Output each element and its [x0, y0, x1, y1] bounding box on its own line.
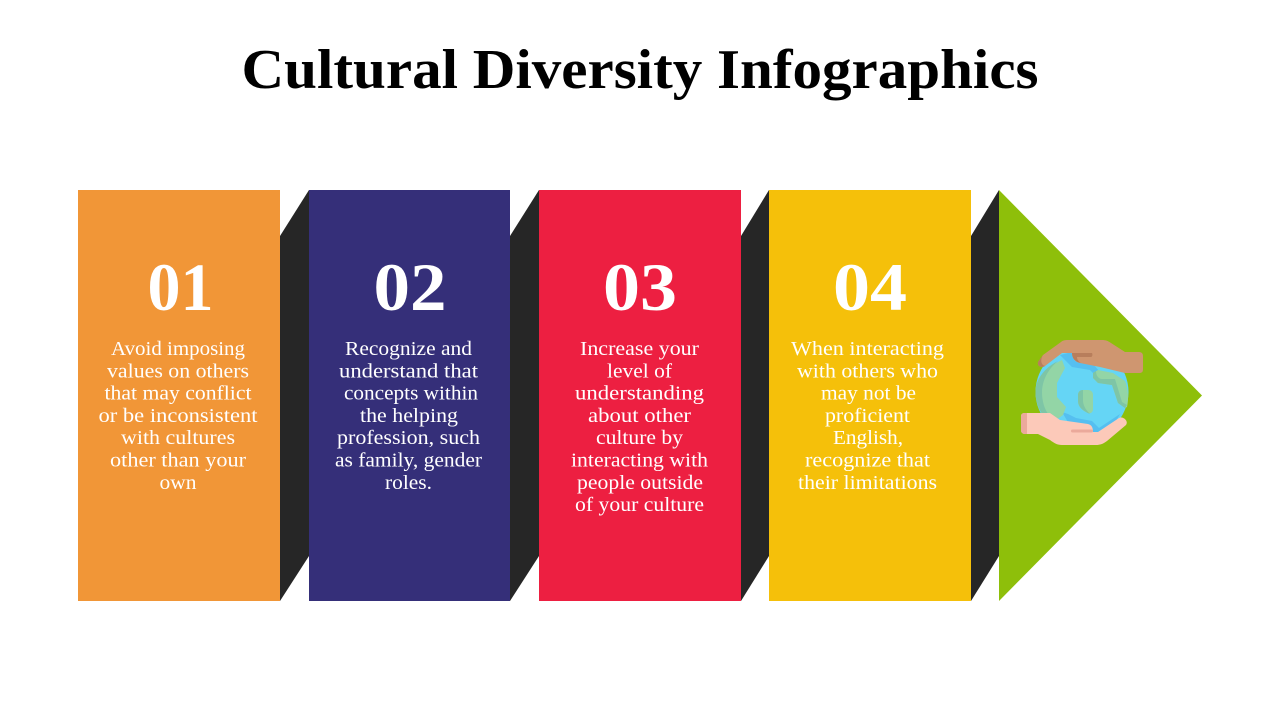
text block 04: proficient	[825, 405, 910, 427]
text block 01: other than your	[110, 450, 246, 472]
text block 03: culture by	[596, 427, 684, 449]
text block 03: about other	[588, 405, 691, 427]
center land	[1078, 390, 1093, 413]
text block 03: people outside	[577, 472, 703, 494]
text block 02: understand that	[339, 360, 478, 382]
fold connector 3	[741, 190, 769, 601]
text block 04	[791, 338, 944, 494]
text block 03	[571, 338, 708, 516]
text block 04: recognize that	[805, 450, 930, 472]
text block 02: as family, gender	[335, 450, 482, 472]
fold connector 1	[280, 190, 309, 601]
text block 03: Increase your	[580, 338, 699, 360]
panel: step 02	[309, 190, 510, 601]
text block 04: When interacting	[791, 338, 944, 360]
text block 01: values on others	[107, 360, 249, 382]
number 01: 01	[148, 249, 214, 325]
panel: step 04	[769, 190, 971, 601]
text block 01: with cultures	[121, 427, 235, 449]
fold connector 4	[971, 190, 999, 601]
text block 01: or be inconsistent	[98, 405, 258, 427]
text block 02: Recognize and	[345, 338, 472, 360]
right land	[1093, 370, 1128, 408]
fold connector 2	[510, 190, 539, 601]
panel: step 01	[78, 190, 280, 601]
panel: step 03	[539, 190, 741, 601]
text block 01: Avoid imposing	[111, 338, 245, 360]
left land	[1036, 360, 1066, 423]
text block 02: roles.	[385, 472, 432, 494]
text block 03: understanding	[575, 383, 704, 405]
text block 01	[98, 338, 258, 494]
text block 04: English,	[833, 427, 903, 449]
text block 02: concepts within	[344, 383, 478, 405]
text block 02	[335, 338, 482, 494]
text block 03: interacting with	[571, 450, 708, 472]
dark blue coast shading	[1060, 352, 1120, 436]
title: Cultural Diversity Infographics	[242, 39, 1038, 101]
text block 03: of your culture	[575, 494, 704, 516]
icon: hands holding globe	[1021, 340, 1143, 445]
text block 03: level of	[607, 360, 672, 382]
text block 01: own	[160, 472, 196, 494]
text block 04: their limitations	[798, 472, 937, 494]
text block 02: profession, such	[337, 427, 480, 449]
number 03: 03	[603, 249, 677, 325]
arrow head	[999, 190, 1202, 601]
lower hand	[1021, 413, 1127, 445]
text block 04: with others who	[797, 360, 938, 382]
globe	[1036, 346, 1128, 438]
text block 02: the helping	[360, 405, 458, 427]
upper hand	[1038, 340, 1143, 373]
text block 04: may not be	[821, 383, 916, 405]
number 04: 04	[833, 249, 907, 325]
text block 01: that may conflict	[104, 383, 252, 405]
number 02: 02	[374, 249, 446, 325]
